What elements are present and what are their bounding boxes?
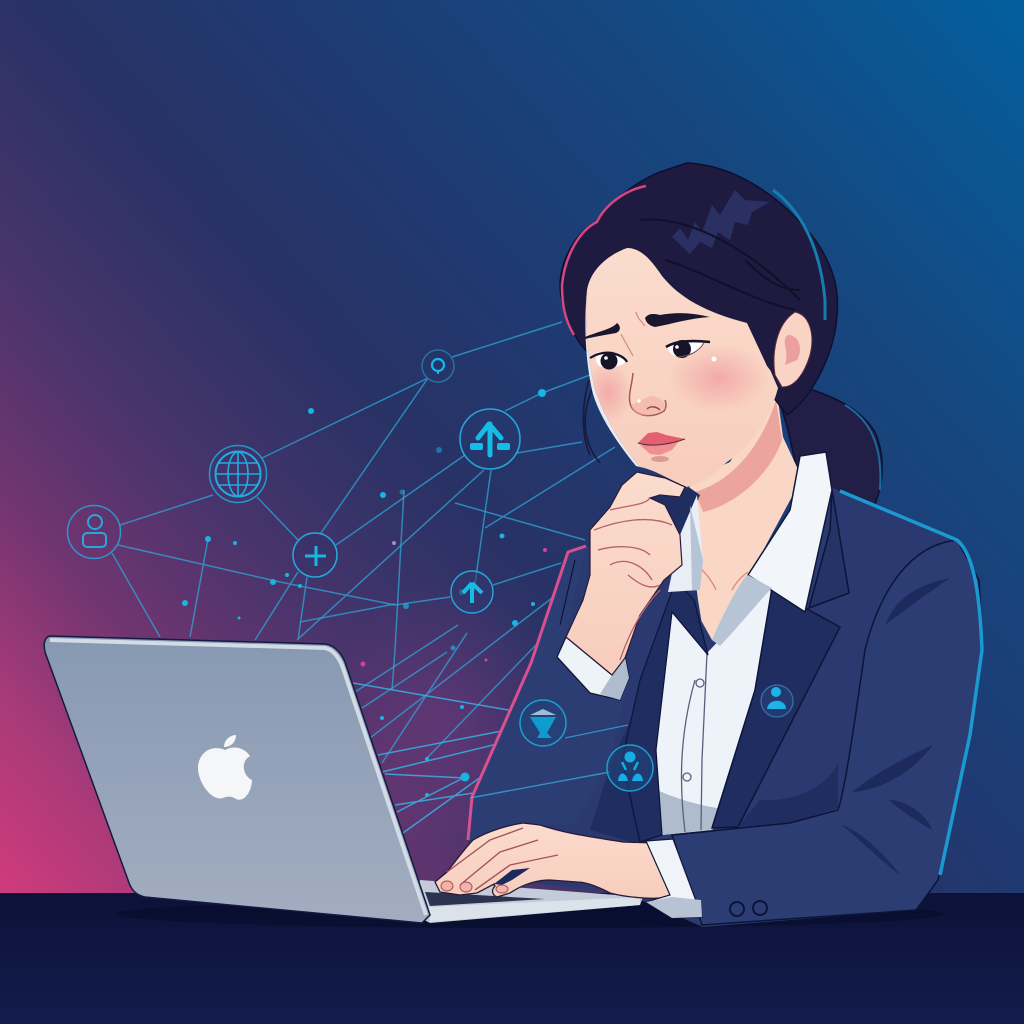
laptop [44, 636, 430, 923]
typing hand [435, 823, 675, 898]
left collar [668, 495, 703, 592]
hair sideburn [747, 323, 772, 370]
left eye [590, 352, 627, 370]
face left highlight [585, 290, 640, 467]
network dots [182, 389, 790, 801]
neck shadow [695, 400, 782, 512]
person node on jacket [761, 685, 793, 717]
finger gap lines [594, 498, 672, 660]
laptop lid [44, 636, 430, 923]
desk shadow [115, 900, 945, 928]
jacket buttons [730, 901, 767, 916]
hair pink rim [562, 186, 646, 335]
gap between thumb and index [494, 868, 530, 885]
keyboard [425, 892, 545, 906]
icon: big arrow node [460, 409, 520, 469]
face [586, 248, 778, 487]
lid rim highlight [50, 640, 426, 915]
upper lapel [809, 490, 849, 608]
shirt [656, 585, 785, 835]
right sleeve [672, 540, 983, 925]
ear [774, 312, 812, 387]
background glow behind laptop [320, 580, 560, 860]
collar inner shadow [712, 575, 772, 646]
pink jacket rim [468, 546, 586, 840]
jacket lapel right [712, 588, 840, 828]
hair strands [640, 220, 800, 310]
group node [607, 745, 653, 791]
icon: plus node [293, 533, 337, 577]
icon: small arrow node [451, 571, 493, 613]
dark jacket gap behind fingers [645, 488, 700, 540]
woman figure [415, 163, 983, 927]
lines crossing sleeve [470, 725, 628, 798]
eyebrows [585, 313, 710, 339]
finger lines [447, 828, 558, 890]
sleeve cuff [646, 839, 702, 918]
raised cuff [557, 637, 629, 700]
emblem node [520, 700, 566, 746]
sleeve creases [842, 578, 950, 875]
laptop base [415, 880, 643, 923]
lips [638, 432, 685, 445]
raised hand [566, 472, 685, 675]
chest shadow [738, 763, 838, 827]
shirt placket lines and buttons [681, 653, 707, 832]
hair highlight [672, 190, 770, 254]
icon: person node [68, 506, 120, 558]
nails [441, 881, 508, 893]
hair blue rim [773, 190, 825, 320]
left sleeve [468, 545, 629, 848]
left body shade [590, 700, 660, 845]
apple logo [198, 735, 252, 800]
collar [748, 452, 832, 612]
ponytail [775, 385, 882, 510]
icon: globe node [210, 446, 266, 502]
jacket torso [468, 488, 983, 927]
collarbone lines [700, 568, 748, 590]
head hair back [560, 163, 838, 415]
icon: bulb node [422, 350, 454, 382]
blue jacket rim [840, 491, 982, 875]
neck [688, 385, 802, 655]
hair over forehead [624, 204, 792, 365]
cheek blush [592, 350, 758, 418]
cheek sparkle [712, 356, 716, 362]
ponytail blue rim [845, 405, 880, 490]
floor desk [0, 893, 1024, 1024]
right eye [666, 340, 710, 358]
jacket left front [622, 580, 708, 842]
brow shadow and frown lines [621, 312, 645, 356]
network of connection lines [112, 322, 775, 833]
loose strands [583, 380, 600, 463]
nose [629, 373, 666, 416]
shirt lower shadow [657, 790, 730, 835]
